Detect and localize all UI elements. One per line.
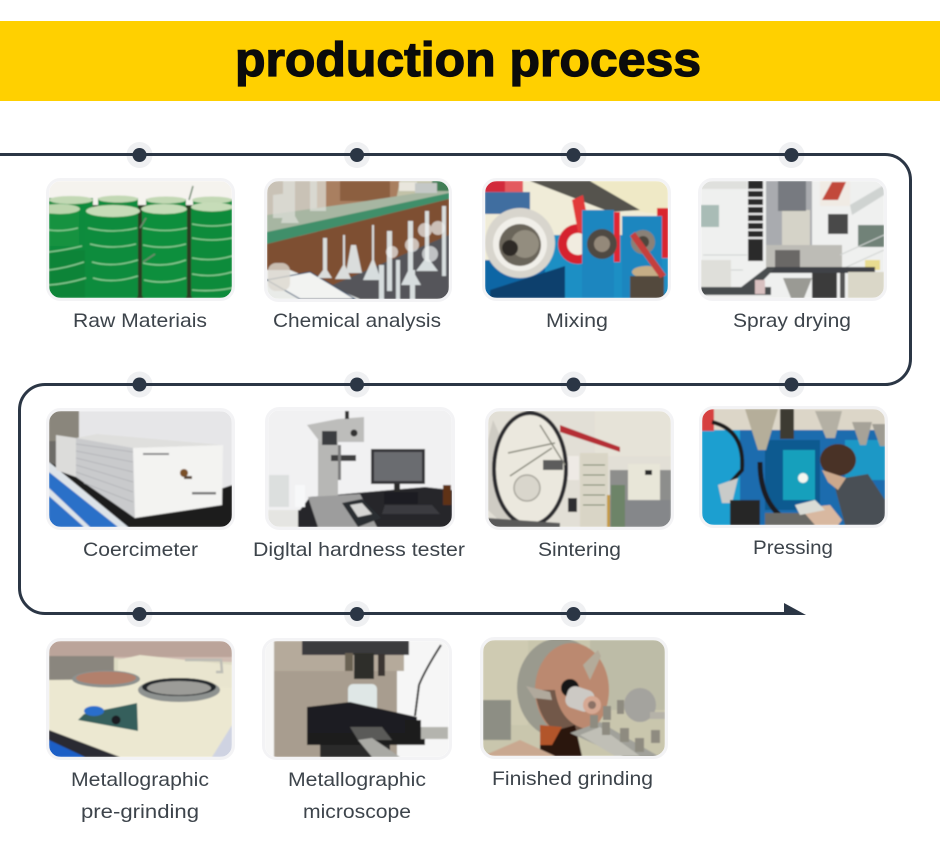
label: spray drying: Spray drying — [733, 310, 851, 332]
label: mixing: Mixing — [546, 310, 608, 332]
label: raw materials: Raw Materiais — [73, 310, 207, 332]
process flow line with arrow — [0, 154, 910, 615]
title: production process — [235, 34, 701, 87]
step markers — [126, 142, 805, 627]
photo: digital hardness tester — [268, 410, 452, 527]
image frames — [48, 180, 886, 758]
label: metallographic pre-grinding — [71, 769, 209, 823]
photo: metallographic pre-grinding machine — [49, 641, 232, 757]
photo: sintering furnace — [488, 411, 671, 527]
label: pressing: Pressing — [753, 537, 833, 559]
photo: spray drying tower — [701, 181, 884, 298]
label: metallographic pre-grinding: pre-grinding — [81, 801, 199, 823]
label: metallographic microscope: microscope — [303, 801, 411, 823]
label: coercimeter: Coercimeter — [83, 539, 199, 561]
photo: metallographic microscope — [265, 641, 449, 757]
photo: mixing machines — [485, 181, 668, 298]
photo: finished grinding lathe — [483, 638, 665, 760]
label: finished grinding: Finished grinding — [492, 768, 653, 790]
photo: chemical analysis glassware — [267, 181, 449, 299]
label: metallographic pre-grinding: Metallographic — [71, 769, 209, 791]
label: digital hardness tester: Digltal hardness tester — [253, 539, 466, 561]
title banner — [0, 21, 940, 101]
label: sintering: Sintering — [538, 539, 621, 561]
photo: pressing machine operator — [702, 409, 885, 525]
label: chemical analysis: Chemical analysis — [273, 310, 441, 332]
label: metallographic microscope — [288, 769, 426, 823]
label: metallographic microscope: Metallographic — [288, 769, 426, 791]
photo: coercimeter instrument — [49, 411, 232, 527]
photo: raw materials green drums — [40, 181, 233, 298]
